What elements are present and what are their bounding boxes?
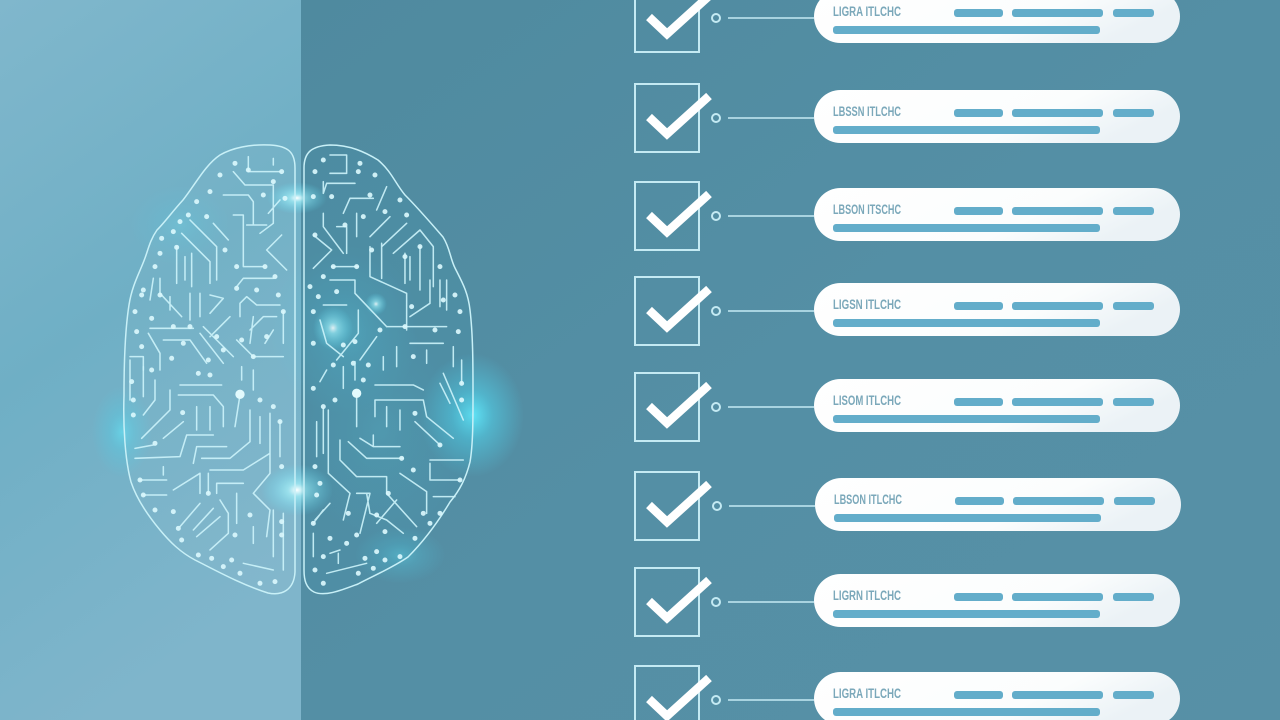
pill card — [814, 672, 1180, 720]
pill card — [814, 0, 1180, 43]
checklist row 6 — [635, 472, 1181, 540]
checkbox with tick — [635, 182, 709, 250]
checkbox with tick — [635, 472, 709, 540]
checkbox with tick — [635, 277, 709, 345]
checkbox with tick — [635, 568, 709, 636]
checklist row 7 — [635, 568, 1180, 636]
pill card: LBSON ITSCHC — [833, 202, 901, 217]
connector — [712, 212, 814, 220]
checkbox with tick — [635, 666, 709, 720]
checkbox with tick — [635, 84, 709, 152]
brain illustration — [92, 145, 524, 594]
checklist row 2 — [635, 84, 1180, 152]
pill card: LIGRA ITLCHC — [833, 4, 901, 19]
left hemisphere outline — [124, 145, 295, 594]
pill card: LBSSN ITLCHC — [833, 104, 901, 119]
outer glows — [92, 182, 524, 583]
connector — [712, 696, 814, 704]
circuit traces: lower brain — [130, 360, 463, 583]
connector — [712, 14, 814, 22]
connector — [712, 598, 814, 606]
connector — [712, 403, 814, 411]
pill card — [814, 283, 1180, 336]
checklist row 1 — [635, 0, 1180, 52]
pill card — [814, 379, 1180, 432]
pill card — [814, 90, 1180, 143]
background: left light panel — [0, 0, 301, 720]
connector — [712, 114, 814, 122]
checklist row 4 — [635, 277, 1180, 345]
pill card — [815, 478, 1181, 531]
pill card — [814, 574, 1180, 627]
pill card: LIGSN ITLCHC — [833, 297, 901, 312]
connector — [713, 502, 815, 510]
pill card: LISOM ITLCHC — [833, 393, 901, 408]
right hemisphere outline — [304, 145, 473, 594]
pill card: LIGRN ITLCHC — [833, 588, 901, 603]
checklist row 8 — [635, 666, 1180, 720]
checklist row 5 — [635, 373, 1180, 441]
circuit traces: upper brain — [130, 155, 460, 370]
checklist row 3 — [635, 182, 1180, 250]
pill card: LIGRA ITLCHC — [833, 686, 901, 701]
connector — [712, 307, 814, 315]
pill card — [814, 188, 1180, 241]
checkbox with tick — [635, 373, 709, 441]
pill card: LBSON ITLCHC — [834, 492, 902, 507]
checkbox with tick — [635, 0, 709, 52]
background: right dark panel — [301, 0, 1280, 720]
